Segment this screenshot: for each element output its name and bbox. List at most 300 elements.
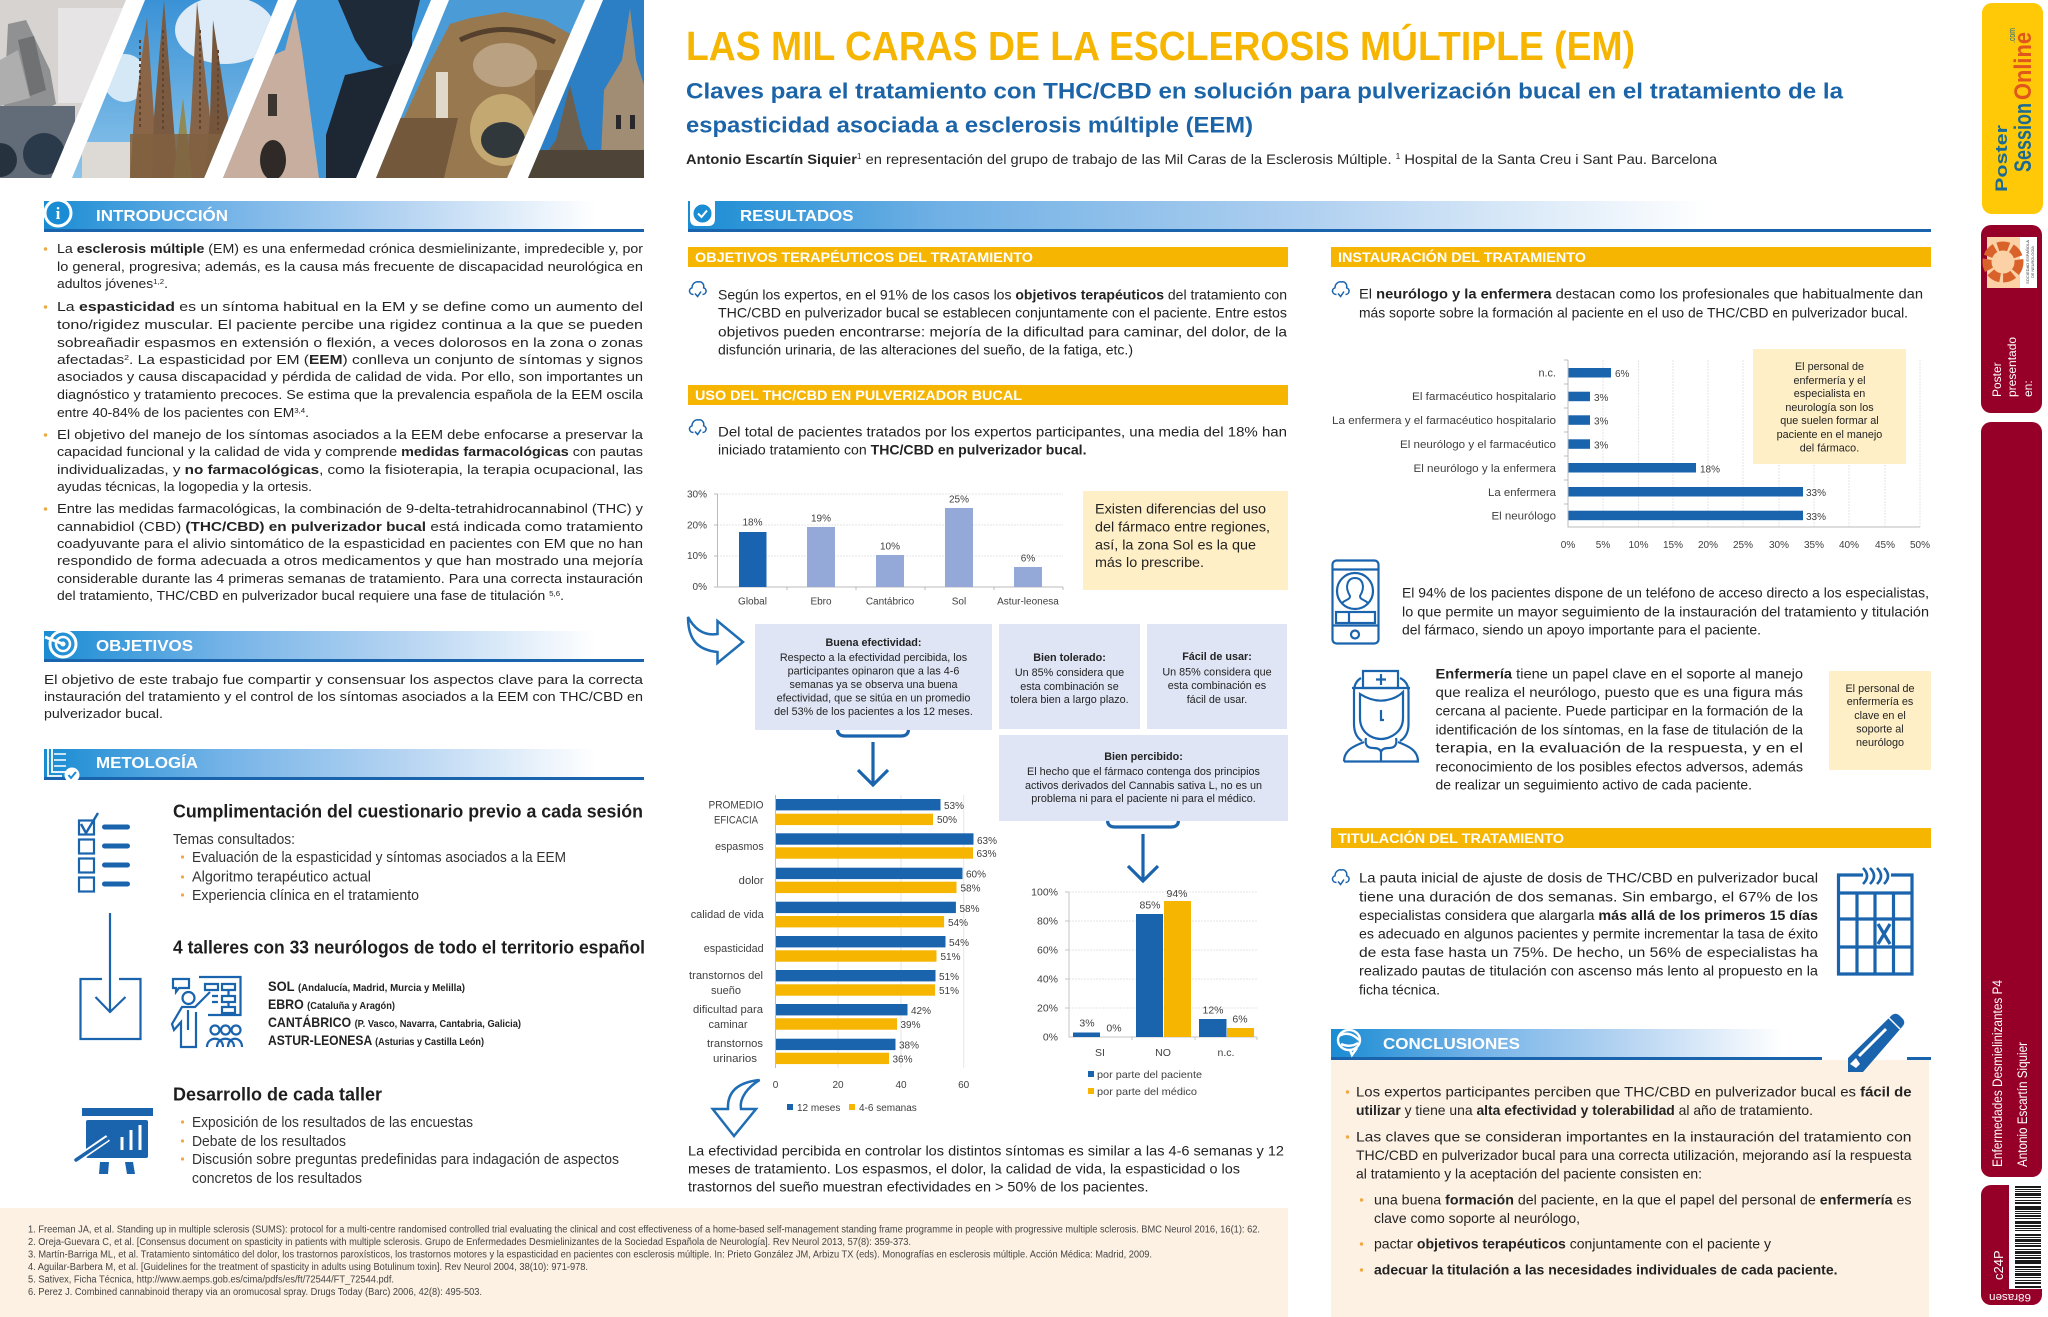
text block: introducción: tono/rigidez muscular. El paciente percibe una rigidez continua a la que se pueden <box>57 317 643 332</box>
callout: enfermería clave: El personal de <box>1845 683 1915 695</box>
conclusions text: utilizar y tiene una alta efectividad y tolerabilidad al año de tratamiento. <box>1356 1102 1813 1118</box>
subheader: objetivos terapéuticos: OBJETIVOS TERAPÉUTICOS DEL TRATAMIENTO <box>695 249 1033 265</box>
box: bien tolerado: Un 85% considera que <box>1015 667 1124 679</box>
bar chart: quién forma al paciente: El farmacéutico hospitalario <box>1412 391 1556 403</box>
icon: presenter with audience <box>172 977 242 1047</box>
section header: introducción: INTRODUCCIÓN <box>96 206 228 225</box>
section header: metodología: METOLOGÍA <box>96 753 198 772</box>
text block: enfermería: identificación de los síntomas, en la fase de titulación de la <box>1436 722 1803 738</box>
bar chart: quién forma al paciente: El neurólogo y el farmacéutico <box>1400 439 1556 451</box>
text block: introducción: adultos jóvenes <box>57 276 149 291</box>
text block: titulación: ficha técnica. <box>1359 982 1440 998</box>
column chart: percepción del cannabis: 20% <box>1037 1002 1058 1014</box>
bar chart: efectividad percibida: 58% <box>960 884 981 894</box>
icon: target <box>45 631 76 657</box>
methodology step 1: cuestionario: Experiencia clínica en el tratamiento <box>192 888 419 904</box>
regions list: ASTUR-LEONESA (Asturias y Castilla León) <box>268 1032 484 1048</box>
regions list: CANTÁBRICO (P. Vasco, Navarra, Cantabria, Galicia) <box>268 1014 521 1030</box>
references panel: 4. Aguilar-Barbera M, et al. [Guidelines for the treatment of spasticity in adults using Botulinum toxin]. Rev Neurol 2004, 38(10): 971-978. <box>28 1262 588 1273</box>
methodology step 3: desarrollo: Desarrollo de cada taller <box>173 1084 382 1104</box>
icon: calendar <box>1838 868 1912 974</box>
bar chart: efectividad percibida: 60 <box>958 1080 970 1091</box>
text block: teléfono: lo que permite un mayor seguimiento de la instauración del tratamiento y titulación <box>1402 604 1929 620</box>
sidebar: PosterSessionOnline logo: .com <box>2007 28 2017 43</box>
text block: introducción: 5,6 <box>549 589 560 598</box>
bar chart: efectividad percibida: 40 <box>895 1080 907 1091</box>
icon: checklist <box>79 813 130 892</box>
bar chart: uso por región: 20% <box>687 520 707 532</box>
regions list <box>268 978 521 1048</box>
text block: enfermería <box>1436 666 1803 792</box>
subheader: objetivos terapéuticos <box>688 247 1288 267</box>
text block: titulación: La pauta inicial de ajuste de dosis de THC/CBD en pulverizador bucal <box>1359 870 1818 886</box>
bar chart: efectividad percibida: 51% <box>939 986 959 997</box>
bar chart: quién forma al paciente: 3% <box>1594 416 1609 428</box>
text block: instauración: El neurólogo y la enfermera destacan como los profesionales que habitualmente dan <box>1359 286 1923 302</box>
bar chart: efectividad percibida: 0 <box>773 1080 779 1091</box>
box: bien tolerado: esta combinación se <box>1020 681 1119 693</box>
bar chart: efectividad percibida: 50% <box>937 815 957 826</box>
icon: cloud check <box>1332 282 1349 296</box>
box: buena efectividad: efectividad, que se sitúa en un promedio <box>777 692 970 704</box>
legend: efficacy chart: 4-6 semanas <box>859 1103 917 1114</box>
text block: titulación: es adecuado en algunos pacientes y permite incrementar la tasa de éxito <box>1359 926 1818 942</box>
callout: enfermería clave: neurólogo <box>1856 737 1904 749</box>
methodology step 2: talleres: 4 talleres con 33 neurólogos de todo el territorio español <box>173 938 645 958</box>
text block: objetivos terapéuticos: disfunción urinaria, de las alteraciones del sueño, de la fatiga, etc.) <box>718 342 1133 358</box>
bar chart: uso por región: Astur-leonesa <box>997 596 1059 608</box>
text block: enfermería: terapia, en la evaluación de la respuesta, y en el <box>1436 740 1803 756</box>
text block: instauración <box>1332 282 1923 320</box>
references panel: 5. Sativex, Ficha Técnica, http://www.aemps.gob.es/cima/pdfs/es/ft/72544/FT_72544.pdf. <box>28 1274 394 1286</box>
text block: introducción: La esclerosis múltiple (EM) es una enfermedad crónica desmielinizante, impredecible y, por <box>57 241 644 256</box>
text block: efectividad conclusion: meses de tratamiento. Los espasmos, el dolor, la calidad de vida, la espasticidad o los <box>688 1160 1240 1176</box>
authors line: Hospital de la Santa Creu i Sant Pau. Barcelona <box>1400 151 1717 167</box>
text block: introducción: . <box>305 405 309 420</box>
methodology step 1: cuestionario: Cumplimentación del cuestionario previo a cada sesión <box>173 802 643 822</box>
logo: sociedad de neurología: DE NEUROLOGÍA <box>2030 246 2035 278</box>
column chart: percepción del cannabis: n.c. <box>1218 1047 1234 1059</box>
bar chart: quién forma al paciente: La enfermera <box>1488 487 1557 499</box>
legend: efficacy chart: 12 meses <box>797 1103 840 1114</box>
bar chart: efectividad percibida: sueño <box>711 985 741 997</box>
column chart: percepción del cannabis: 6% <box>1232 1014 1248 1026</box>
methodology step 1: cuestionario: Algoritmo terapéutico actual <box>192 870 371 886</box>
methodology step 3: desarrollo: concretos de los resultados <box>192 1171 362 1187</box>
conclusions text: clave como soporte al neurólogo, <box>1374 1210 1580 1226</box>
text block: titulación: tiene una duración de dos semanas. Sin embargo, el 67% de los <box>1359 888 1818 904</box>
logo: sociedad de neurología: SOCIEDAD ESPAÑOLA <box>2025 240 2030 284</box>
bar chart: quién forma al paciente: 20% <box>1698 540 1718 551</box>
subheader: instauración <box>1331 247 1931 267</box>
sidebar: presented at: presentado <box>2005 337 2019 397</box>
text block: introducción: Entre las medidas farmacológicas, la combinación de 9-delta-tetrahidrocannabinol (THC) y <box>57 501 643 516</box>
text block: objetivos: El objetivo de este trabajo fue compartir y consensuar los aspectos clave para la correcta <box>44 672 644 687</box>
box: fácil de usar <box>1147 624 1287 729</box>
callout: personal de enfermería y especialista: del fármaco. <box>1800 442 1859 454</box>
bar chart: quién forma al paciente: 15% <box>1663 540 1683 551</box>
subtitle <box>686 78 1844 138</box>
text block: introducción: cannabidiol (CBD) (THC/CBD) en pulverizador bucal está indicada como tratamiento <box>57 519 643 534</box>
column chart: percepción del cannabis: SI <box>1095 1047 1105 1059</box>
photo: baroque facade <box>370 0 590 178</box>
text block: efectividad conclusion: trastornos del sueño muestran efectividades en > 50% de los pacientes. <box>688 1178 1148 1194</box>
section header: introducción <box>44 200 644 232</box>
bar chart: quién forma al paciente: 30% <box>1769 540 1789 551</box>
text block: introducción: afectadas <box>57 352 114 367</box>
bar chart: uso por región <box>687 490 1063 608</box>
bar chart: uso por región: Global <box>738 596 767 608</box>
authors line: Antonio Escartín Siquier <box>686 151 857 167</box>
bar chart: quién forma al paciente: 35% <box>1804 540 1824 551</box>
callout: personal de enfermería y especialista <box>1753 349 1906 464</box>
text block: enfermería: Enfermería tiene un papel clave en el soporte al manejo <box>1436 666 1803 682</box>
column chart: percepción del cannabis: 60% <box>1037 944 1058 956</box>
text block: introducción: considerable durante las 4 primeras semanas de tratamiento. Para una correcta instauración <box>57 571 643 586</box>
conclusions text: pactar objetivos terapéuticos conjuntamente con el paciente y <box>1374 1236 1771 1252</box>
references panel: 6. Perez J. Combined cannabinoid therapy via an oromucosal spray. Drugs Today (Barc) 2006, 42(8): 495-503. <box>28 1287 482 1298</box>
conclusions text: THC/CBD en pulverizador bucal para una correcta utilización, mejorando así la respuesta <box>1356 1147 1912 1163</box>
sidebar: PosterSessionOnline logo: Poster <box>1992 125 2011 192</box>
bar chart: quién forma al paciente <box>1332 360 1930 551</box>
bar chart: efectividad percibida: transtornos del <box>689 970 763 982</box>
authors line: en representación del grupo de trabajo de las Mil Caras de la Esclerosis Múltiple. <box>862 151 1396 167</box>
column chart: percepción del cannabis: 100% <box>1031 886 1058 898</box>
column chart: percepción del cannabis: 0% <box>1106 1022 1122 1034</box>
box: buena efectividad: Respecto a la efectividad percibida, los <box>780 652 968 664</box>
bar chart: efectividad percibida: 20 <box>832 1080 844 1091</box>
sidebar: barcode: 68rasen <box>1989 1291 2031 1303</box>
bar chart: efectividad percibida: EFICACIA <box>714 814 759 826</box>
bar chart: efectividad percibida: 54% <box>949 938 969 949</box>
subheader: uso del THC/CBD: USO DEL THC/CBD EN PULVERIZADOR BUCAL <box>695 387 1022 403</box>
icon: speech swirl <box>1338 1030 1360 1055</box>
conclusions text: una buena formación del paciente, en la que el papel del personal de enfermería es <box>1374 1192 1911 1208</box>
photo strip of Spanish monuments <box>0 0 645 180</box>
text block: introducción: asociados y causa discapacidad y pérdida de calidad de vida. Por ello, son importantes un <box>57 369 643 384</box>
callout: diferencias entre regiones: más lo prescribe. <box>1095 555 1204 570</box>
methodology step 3: desarrollo: Exposición de los resultados de las encuestas <box>192 1115 473 1131</box>
section header: objetivos: OBJETIVOS <box>96 638 193 655</box>
methodology step 1: cuestionario: Evaluación de la espasticidad y síntomas asociados a la EEM <box>192 850 566 866</box>
conclusions text: Los expertos participantes perciben que THC/CBD en pulverizador bucal es fácil de <box>1356 1084 1912 1100</box>
references panel: 1. Freeman JA, et al. Standing up in multiple sclerosis (SUMS): protocol for a multi-centre randomised controlled trial evaluating the clinical and cost effectiveness of a home-based self-management standing frame programme in people with progressive multiple sclerosis. BMC Neurol 2016, 16(1): 62. <box>28 1224 1260 1236</box>
text block: introducción: sobreañadir espasmos en extensión o flexión, a veces dolorosos en la zona o zonas <box>57 335 643 350</box>
text block: objetivos terapéuticos: THC/CBD en pulverizador bucal se establecen conjuntamente con el paciente. Entre estos <box>718 304 1287 320</box>
bar chart: quién forma al paciente: 33% <box>1806 512 1826 523</box>
bar chart: efectividad percibida: 58% <box>960 904 980 915</box>
bar chart: uso por región: Sol <box>952 596 966 608</box>
callout: personal de enfermería y especialista: especialista en <box>1794 388 1865 400</box>
text block: introducción: individualizadas, y no farmacológicas , como la fisioterapia, la terapia ocupacional, las <box>57 462 643 477</box>
text block: uso del fármaco: iniciado tratamiento con THC/CBD en pulverizador bucal. <box>718 442 1086 458</box>
callout: diferencias entre regiones <box>1083 491 1288 590</box>
text block: objetivos terapéuticos: Según los expertos, en el 91% de los casos los objetivos terapéuticos del tratamiento con <box>718 286 1287 302</box>
text block: enfermería: reconocimiento de los posibles efectos adversos, además <box>1436 758 1803 774</box>
bar chart: quién forma al paciente: 3% <box>1594 393 1609 404</box>
bar chart: uso por región: 18% <box>742 518 763 528</box>
arrow: down to perception chart <box>1108 821 1178 881</box>
bar chart: uso por región: 19% <box>811 514 831 524</box>
text block: titulación: de esta fase hasta un 75%. De hecho, un 56% de especialistas ha <box>1359 944 1818 960</box>
box: fácil de usar: Fácil de usar: <box>1182 651 1252 663</box>
icon: presentation board <box>76 1108 153 1174</box>
bar chart: quién forma al paciente: 33% <box>1806 488 1826 499</box>
bar chart: quién forma al paciente: 6% <box>1615 369 1630 380</box>
text block: introducción: El objetivo del manejo de los síntomas asociados a la EEM debe enfocarse a preservar la <box>57 427 644 442</box>
callout: personal de enfermería y especialista: paciente en el manejo <box>1777 429 1882 441</box>
bar chart: quién forma al paciente: 3% <box>1594 440 1609 452</box>
bar chart: efectividad percibida: 53% <box>944 801 964 812</box>
conclusions text: adecuar la titulación a las necesidades individuales de cada paciente. <box>1374 1262 1838 1278</box>
icon: check badge <box>690 201 715 226</box>
text block: enfermería: cercana al paciente. Puede participar en la formación de la <box>1436 702 1803 718</box>
sidebar: presented at: Poster <box>1990 362 2004 397</box>
bar chart: efectividad percibida: 42% <box>911 1006 931 1017</box>
sidebar: barcode: c24P <box>1991 1250 2006 1280</box>
callout: enfermería clave: soporte al <box>1856 724 1904 736</box>
sidebar: PosterSessionOnline logo <box>1982 3 2043 214</box>
photo: Sagrada Familia <box>70 0 280 178</box>
sidebar: session and author <box>1981 422 2042 1177</box>
text block: objetivos: pulverizador bucal. <box>44 706 163 721</box>
text block: introducción: diagnóstico y tratamiento precoces. Se estima que la prevalencia española de la EEM oscila <box>57 387 644 402</box>
sidebar: PosterSessionOnline logo: Session <box>2010 103 2037 172</box>
bar chart: uso por región: 30% <box>687 490 707 500</box>
methodology step 1: cuestionario <box>79 802 643 904</box>
title: LAS MIL CARAS DE LA ESCLEROSIS MÚLTIPLE (EM) <box>686 23 1635 69</box>
bar chart: efectividad percibida: caminar <box>708 1019 748 1031</box>
methodology step 2: talleres <box>172 938 645 1048</box>
text block: objetivos: instauración del tratamiento y el control de los síntomas asociados a la EEM con THC/CBD en <box>44 689 643 704</box>
bar chart: quién forma al paciente: 10% <box>1628 540 1649 551</box>
text block: teléfono: del fármaco, siendo un apoyo importante para el paciente. <box>1402 622 1761 638</box>
text block: introducción: capacidad funcional y la calidad de vida y comprende medidas farmacológicas con pautas <box>57 444 643 459</box>
box: bien percibido <box>999 735 1288 821</box>
subtitle: Claves para el tratamiento con THC/CBD en solución para pulverización bucal en el tratamiento de la <box>686 78 1844 104</box>
icon: cloud check <box>689 282 706 296</box>
regions list: EBRO (Cataluña y Aragón) <box>268 996 395 1012</box>
callout: diferencias entre regiones: Existen diferencias del uso <box>1095 502 1266 516</box>
logo: sociedad de neurología <box>1987 237 2037 288</box>
box: fácil de usar: Un 85% considera que <box>1162 666 1272 678</box>
bar chart: efectividad percibida: transtornos <box>707 1038 764 1050</box>
text block: introducción: respondido de forma adecuada a otros medicamentos y que han mostrado una mejoría <box>57 553 644 568</box>
box: bien percibido: activos derivados del Cannabis sativa L, no es un <box>1025 780 1262 792</box>
methodology step 1: cuestionario: Temas consultados: <box>173 832 295 848</box>
box: fácil de usar: esta combinación es <box>1168 680 1267 692</box>
text block: introducción: coadyuvante para el alivio sintomático de la espasticidad en pacientes con EM que no han <box>57 536 643 551</box>
text block: efectividad conclusion <box>688 1142 1284 1194</box>
legend: column chart: por parte del paciente <box>1097 1069 1202 1081</box>
icon: pencil <box>1848 1014 1904 1072</box>
callout: enfermería clave <box>1829 671 1931 770</box>
bar chart: quién forma al paciente: 45% <box>1875 540 1895 551</box>
text block: introducción: del tratamiento, THC/CBD en pulverizador bucal requiere una fase de titulación <box>57 588 519 603</box>
bar chart: quién forma al paciente: 50% <box>1910 540 1930 551</box>
bar chart: quién forma al paciente: 5% <box>1596 540 1610 551</box>
icon: clipboard with check <box>48 749 80 782</box>
bar chart: efectividad percibida: 63% <box>977 836 997 847</box>
column chart: percepción del cannabis: 12% <box>1202 1004 1224 1016</box>
sidebar: presented at: en: <box>2021 380 2035 397</box>
text block: introducción: lo general, progresiva; además, es la causa más frecuente de discapacidad neurológica en <box>57 259 643 274</box>
bar chart: efectividad percibida: 60% <box>966 870 986 880</box>
section header: resultados: RESULTADOS <box>740 208 854 225</box>
arrow: curved right <box>688 617 743 663</box>
bar chart: efectividad percibida: espasmos <box>715 841 764 853</box>
references panel: 2. Oreja-Guevara C, et al. [Consensus document on spasticity in patients with multiple sclerosis. Grupo de Enfermedades Desmielinizantes de la Sociedad Española de Neurología]. Rev Neurol 2013, 57(8): 359-373. <box>28 1237 911 1248</box>
icon: cloud check <box>689 420 706 434</box>
bar chart: efectividad percibida: dolor <box>739 875 764 887</box>
text block: introducción: entre 40-84% de los pacientes con EM <box>57 405 284 420</box>
legend: column chart <box>1088 1069 1202 1098</box>
subheader: uso del THC/CBD <box>688 385 1288 405</box>
text block: uso del fármaco: Del total de pacientes tratados por los expertos participantes, una media del 18% han <box>718 424 1287 440</box>
text block: instauración: más soporte sobre la formación al paciente en el uso de THC/CBD en pulverizador bucal. <box>1359 304 1908 320</box>
bar chart: uso por región: 10% <box>687 551 707 562</box>
bar chart: quién forma al paciente: 0% <box>1561 540 1575 551</box>
box: buena efectividad: Buena efectividad: <box>826 637 922 649</box>
bar chart: uso por región: 10% <box>880 542 900 552</box>
bar chart: uso por región: 6% <box>1021 554 1035 564</box>
text block: introducción <box>44 241 644 603</box>
bar chart: efectividad percibida: 54% <box>948 918 968 929</box>
bar chart: quién forma al paciente: La enfermera y el farmacéutico hospitalario <box>1332 415 1556 427</box>
box: buena efectividad <box>755 624 992 730</box>
methodology step 3: desarrollo <box>76 1084 619 1187</box>
box: buena efectividad: participantes opinaron que a las 4-6 <box>788 666 959 678</box>
references panel <box>0 1208 1288 1317</box>
section header: resultados <box>688 201 1931 232</box>
sidebar: session and author: Enfermedades Desmielinizantes P4 <box>1990 980 2005 1167</box>
bar chart: quién forma al paciente: 18% <box>1700 464 1720 476</box>
column chart: percepción del cannabis: 94% <box>1166 888 1188 900</box>
callout: personal de enfermería y especialista: enfermería y el <box>1793 375 1866 387</box>
bar chart: efectividad percibida: 36% <box>892 1054 913 1066</box>
methodology step 3: desarrollo: Discusión sobre preguntas predefinidas para indagación de aspectos <box>192 1152 619 1168</box>
regions list: SOL (Andalucía, Madrid, Murcia y Melilla) <box>268 978 465 994</box>
bar chart: quién forma al paciente: El neurólogo y la enfermera <box>1414 463 1557 475</box>
conclusions text: al tratamiento y la aceptación del paciente consisten en: <box>1356 1166 1702 1182</box>
text block: introducción: 1,2 <box>153 277 164 286</box>
text block: titulación: especialistas considera que alargarla más allá de los primeros 15 días <box>1359 907 1818 923</box>
bar chart: efectividad percibida: 38% <box>899 1040 919 1052</box>
callout: diferencias entre regiones: así, la zona Sol es la que <box>1095 538 1256 552</box>
bar chart: efectividad percibida: 51% <box>939 972 959 983</box>
box: bien tolerado: tolera bien a largo plazo. <box>1010 694 1129 706</box>
column chart: percepción del cannabis: 85% <box>1139 900 1161 912</box>
column chart: percepción del cannabis: 40% <box>1037 974 1058 986</box>
text block: enfermería: de realizar un seguimiento activo de cada paciente. <box>1436 776 1752 792</box>
text block: introducción: . <box>560 588 564 603</box>
box: bien percibido: El hecho que el fármaco contenga dos principios <box>1027 766 1261 778</box>
bar chart: efectividad percibida <box>689 795 997 1114</box>
conclusions text: Las claves que se consideran importantes en la instauración del tratamiento con <box>1356 1128 1912 1144</box>
callout: enfermería clave: clave en el <box>1854 710 1906 722</box>
bar chart: efectividad percibida: PROMEDIO <box>708 800 764 812</box>
methodology step 3: desarrollo: Debate de los resultados <box>192 1134 346 1150</box>
column chart: percepción del cannabis: 80% <box>1037 916 1058 928</box>
column chart: percepción del cannabis <box>1031 886 1257 1098</box>
sidebar: presented at <box>1981 225 2042 413</box>
bar chart: uso por región: Ebro <box>810 596 832 608</box>
legend: column chart: por parte del médico <box>1097 1086 1197 1098</box>
text block: objetivos terapéuticos <box>689 282 1287 358</box>
legend: efficacy chart <box>787 1103 917 1114</box>
text block: introducción: ayudas técnicas, la logopedia y la ortesis. <box>57 479 312 494</box>
bar chart: efectividad percibida: 39% <box>900 1020 921 1031</box>
bar chart: uso por región: Cantábrico <box>866 596 915 608</box>
arrow: down to efficacy chart <box>838 730 908 785</box>
section header: conclusiones: CONCLUSIONES <box>1383 1036 1520 1053</box>
box: bien percibido: Bien percibido: <box>1104 751 1183 763</box>
section header: metodología <box>44 749 644 782</box>
section header: objetivos <box>44 631 644 662</box>
icon: nurse <box>1344 671 1418 762</box>
text block: introducción: . <box>164 276 168 291</box>
box: buena efectividad: del 53% de los pacientes a los 12 meses. <box>774 706 973 718</box>
bar chart: quién forma al paciente: 25% <box>1733 540 1753 551</box>
conclusions text <box>1346 1084 1912 1278</box>
authors line: 1 <box>1396 152 1401 161</box>
box: buena efectividad: semanas ya se observa una buena <box>789 679 958 691</box>
panel: conclusiones <box>1331 1014 1931 1317</box>
bar chart: efectividad percibida: dificultad para <box>693 1004 764 1016</box>
callout: personal de enfermería y especialista: neurología son los <box>1785 402 1874 414</box>
bar chart: efectividad percibida: 51% <box>940 952 961 963</box>
box: bien tolerado <box>999 624 1140 729</box>
subheader: titulación: TITULACIÓN DEL TRATAMIENTO <box>1338 829 1564 846</box>
text block: efectividad conclusion: La efectividad percibida en controlar los distintos síntomas es similar a las 4-6 semanas y 12 <box>688 1142 1284 1158</box>
icon: info <box>45 200 71 226</box>
section header: conclusiones <box>1331 1029 1931 1060</box>
bar chart: efectividad percibida: calidad de vida <box>691 909 765 921</box>
box: fácil de usar: fácil de usar. <box>1187 694 1247 706</box>
callout: enfermería clave: enfermería es <box>1847 696 1914 708</box>
photo: cathedral tower and statue <box>220 0 435 180</box>
text block: objetivos terapéuticos: objetivos pueden encontrarse: mejoría de la dificultad para caminar, del dolor, de la <box>718 324 1287 340</box>
text block: introducción: La espasticidad es un síntoma habitual en la EM y se define como un aumento del <box>57 299 643 314</box>
column chart: percepción del cannabis: 0% <box>1043 1032 1058 1044</box>
bar chart: uso por región: 25% <box>949 494 969 506</box>
bar chart: quién forma al paciente: 40% <box>1839 540 1859 551</box>
text block: enfermería: que realiza el neurólogo, puesto que es una figura más <box>1436 684 1803 700</box>
text block: titulación: realizado pautas de titulación con ascenso más lento al propuesto en la <box>1359 962 1818 978</box>
text block: introducción: . La espasticidad por EM ( <box>129 352 310 367</box>
text block: introducción: 2 <box>124 353 129 362</box>
subtitle: espasticidad asociada a esclerosis múltiple (EEM) <box>686 112 1253 138</box>
sidebar: barcode <box>1981 1185 2042 1305</box>
photo: Santiago cathedral towers <box>525 0 645 178</box>
icon: info: i <box>56 204 61 223</box>
subheader: instauración: INSTAURACIÓN DEL TRATAMIENTO <box>1338 248 1586 265</box>
column chart: percepción del cannabis: NO <box>1155 1047 1171 1059</box>
references panel: 3. Martín-Barriga ML, et al. Tratamiento sintomático del dolor, los trastornos paroxísticos, los trastornos motores y la espasticidad en pacientes con esclerosis múltiple. In: Prieto González JM, Arbizu TX (eds). Monografías en esclerosis múltiple. Acción Médica: Madrid, 2009. <box>28 1250 1152 1260</box>
text block: objetivos <box>44 672 644 721</box>
sidebar: session and author: Antonio Escartín Siquier <box>2015 1042 2030 1167</box>
text block: introducción: 3,4 <box>294 406 305 415</box>
callout: personal de enfermería y especialista: El personal de <box>1795 361 1864 373</box>
text block: teléfono <box>1402 584 1929 638</box>
bar chart: quién forma al paciente: El neurólogo <box>1492 510 1556 522</box>
authors line: 1 <box>857 152 862 161</box>
bar chart: efectividad percibida: 63% <box>976 849 997 860</box>
text block: teléfono: El 94% de los pacientes dispone de un teléfono de acceso directo a los especialistas, <box>1402 584 1929 600</box>
bar chart: efectividad percibida: espasticidad <box>704 943 764 955</box>
icon: cloud check <box>1332 870 1349 884</box>
icon: smartphone <box>1332 560 1378 644</box>
